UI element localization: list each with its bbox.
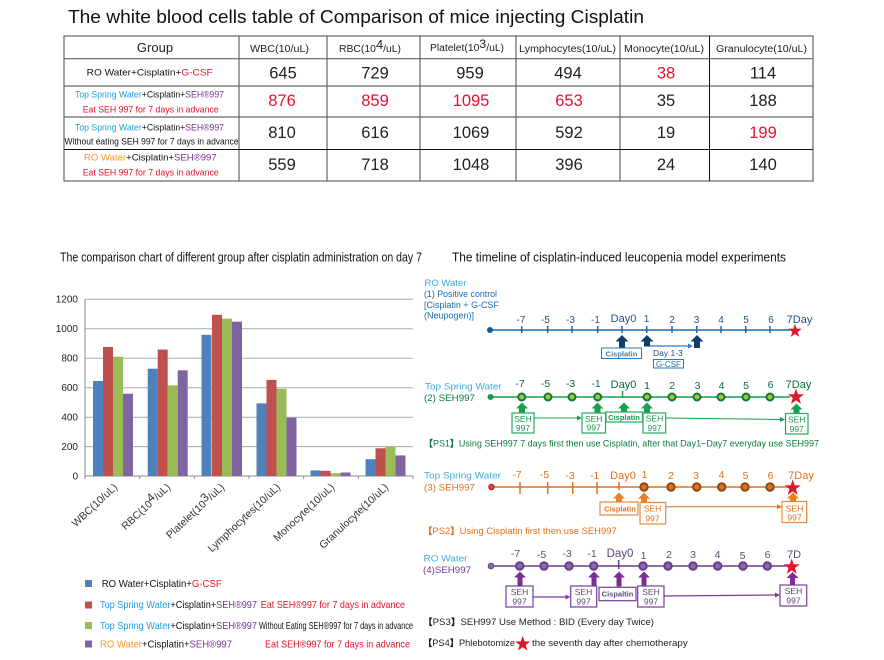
- timeline 2: Top Spring Water SEH997: 997: [516, 423, 530, 433]
- timeline 2: Top Spring Water SEH997: Cisplatin: [608, 413, 640, 422]
- y axis labels: 600: [61, 383, 78, 394]
- table values: 188: [749, 92, 777, 110]
- table group labels: RO Water+Cisplatin+ G-CSF: [87, 68, 213, 78]
- x axis category labels: 3: [197, 490, 212, 505]
- chart legend: Eat SEH®997 for 7 days in advance: [261, 599, 405, 611]
- chart legend: Top Spring Water+Cisplatin+SEH®997: [100, 599, 257, 611]
- timeline 3: Top Spring Water SEH997 after Cisplatin: (3) SEH997: [424, 483, 475, 493]
- title: The white blood cells table of Comparison of mice injecting Cisplatin: [68, 7, 644, 27]
- table values: [268, 64, 777, 174]
- table header row: WBC(10/uL): [250, 43, 309, 55]
- timeline 3: Top Spring Water SEH997 after Cisplatin: -7: [512, 469, 522, 481]
- bars: RO Water plus SEH997: [123, 322, 406, 476]
- timeline 4: RO Water SEH997: SEH: [511, 587, 528, 597]
- table values: 1048: [453, 156, 489, 174]
- chart legend: RO Water+Cisplatin+G-CSF: [102, 578, 222, 590]
- timeline 3: Top Spring Water SEH997 after Cisplatin: 6: [768, 470, 774, 482]
- timeline 4: RO Water SEH997: 6: [765, 549, 771, 561]
- timeline 4: RO Water SEH997: 2: [666, 549, 672, 561]
- table values: 199: [749, 124, 777, 142]
- timeline 3: Top Spring Water SEH997 after Cisplatin: Cisplatin: [604, 504, 636, 514]
- note PS4: the seventh day after chemotherapy: [532, 638, 688, 648]
- timeline 2: Top Spring Water SEH997: 7Day: [786, 379, 812, 391]
- x axis category labels: 4: [143, 490, 158, 505]
- bar chart: [56, 294, 413, 555]
- timeline 3: Top Spring Water SEH997 after Cisplatin: 5: [743, 470, 749, 482]
- timeline 4: RO Water SEH997: Day0: [607, 548, 633, 560]
- timeline 2: Top Spring Water SEH997: 6: [768, 379, 774, 391]
- timeline 2: Top Spring Water SEH997: -7: [515, 378, 525, 390]
- timeline 1: positive control: 5: [743, 315, 749, 326]
- timeline 4: RO Water SEH997: [423, 548, 807, 607]
- timeline 1: positive control: (1) Positive control: [424, 289, 497, 299]
- timeline 2: Top Spring Water SEH997: SEH: [646, 414, 663, 424]
- table values: 876: [268, 92, 296, 110]
- chart legend: RO Water+Cisplatin+SEH®997: [100, 639, 232, 651]
- timeline 2: Top Spring Water SEH997: 997: [587, 422, 601, 432]
- table header row: Lymphocytes(10/uL): [519, 44, 616, 55]
- timeline 3: Top Spring Water SEH997 after Cisplatin: 997: [645, 514, 660, 524]
- y axis labels: [56, 294, 78, 482]
- x axis category labels: Lymphocytes(10/uL): [206, 481, 283, 555]
- timeline 1: positive control: 3: [694, 315, 700, 326]
- table header row: 3: [479, 37, 487, 51]
- timeline 2: Top Spring Water SEH997: 【PS1】Using SEH997 7 days first then use Cisplatin, after that Day1~Day7 everyday use SEH997: [424, 439, 819, 449]
- x axis category labels: Monocyte(10/uL): [271, 481, 337, 544]
- timeline 3: Top Spring Water SEH997 after Cisplatin: 2: [668, 470, 674, 482]
- timeline 1: positive control: 4: [718, 315, 724, 326]
- table header row: /uL): [486, 43, 504, 54]
- timeline 3: Top Spring Water SEH997 after Cisplatin: 1: [642, 469, 648, 481]
- timeline 4: RO Water SEH997: SEH: [642, 587, 660, 597]
- timeline 3: Top Spring Water SEH997 after Cisplatin: 4: [719, 469, 725, 481]
- table values: 140: [749, 156, 777, 174]
- timeline 1: positive control: 7Day: [787, 314, 813, 326]
- timeline 1: positive control: (Neupogen)]: [424, 310, 474, 320]
- timeline 1: positive control: Day 1-3: [653, 348, 683, 358]
- timeline 4: RO Water SEH997: 997: [576, 596, 591, 606]
- timeline 3: Top Spring Water SEH997 after Cisplatin: Top Spring Water: [424, 471, 501, 481]
- timeline 1: positive control: 6: [768, 315, 774, 326]
- note PS4: [423, 636, 688, 650]
- y axis labels: 1000: [56, 324, 78, 335]
- timeline 3: Top Spring Water SEH997 after Cisplatin: -5: [540, 469, 549, 481]
- table values: 810: [268, 124, 296, 142]
- timeline 3: Top Spring Water SEH997 after Cisplatin: -1: [590, 470, 599, 482]
- timeline 2: Top Spring Water SEH997: Top Spring Water: [425, 381, 502, 391]
- timeline 4: RO Water SEH997: 997: [786, 596, 801, 606]
- timeline 2: Top Spring Water SEH997: -1: [591, 378, 601, 390]
- table header row: Group: [137, 40, 173, 55]
- x axis category labels: /uL): [152, 481, 173, 503]
- timeline 4: RO Water SEH997: 997: [644, 596, 658, 606]
- timeline 4: RO Water SEH997: -7: [511, 548, 520, 560]
- table group labels: Without eating SEH 997 for 7 days in advance: [64, 137, 238, 148]
- timeline 2: Top Spring Water SEH997: 5: [743, 380, 749, 392]
- table values: 592: [555, 124, 583, 142]
- timeline 3: Top Spring Water SEH997 after Cisplatin: Day0: [610, 470, 636, 482]
- timeline 1: positive control: 1: [644, 314, 650, 325]
- table group labels: Top Spring Water+Cisplatin+SEH®997: [75, 123, 224, 134]
- table values: 559: [268, 156, 296, 174]
- timeline 3: Top Spring Water SEH997 after Cisplatin: SEH: [786, 504, 803, 514]
- x axis category labels: Platelet(10: [164, 498, 209, 541]
- timeline 1: positive control: Cisplatin: [606, 350, 638, 358]
- timeline 4: RO Water SEH997: SEH: [785, 586, 802, 596]
- table values: 19: [657, 124, 675, 142]
- table values: 114: [750, 64, 776, 82]
- table group labels: [64, 68, 238, 178]
- chart legend: [85, 578, 413, 651]
- bars: Top Spring Water, eat in advance: [103, 315, 386, 476]
- table values: 959: [456, 64, 484, 82]
- timeline 3: Top Spring Water SEH997 after Cisplatin: -3: [565, 470, 575, 482]
- x axis category labels: Granulocyte(10/uL): [317, 481, 391, 551]
- timeline 4: RO Water SEH997: -3: [562, 548, 572, 560]
- timeline 4: RO Water SEH997: 1: [641, 550, 647, 562]
- timeline 2: Top Spring Water SEH997: 997: [647, 423, 662, 433]
- table values: 38: [657, 64, 675, 82]
- timeline 4: RO Water SEH997: 3: [690, 549, 696, 561]
- timeline 1: positive control: Day0: [611, 313, 636, 325]
- timeline 4: RO Water SEH997: 7D: [787, 549, 801, 561]
- chart legend: Without Eating SEH®997 for 7 days in advance: [259, 620, 413, 632]
- timeline 3: Top Spring Water SEH997 after Cisplatin: SEH: [644, 504, 661, 514]
- y axis labels: 0: [72, 472, 78, 482]
- bars: RO Water group: [93, 335, 376, 476]
- timeline 1: positive control: -3: [566, 315, 575, 326]
- x axis category labels: [70, 478, 391, 555]
- timeline 3: Top Spring Water SEH997 after Cisplatin: 997: [787, 512, 802, 522]
- timeline 2: Top Spring Water SEH997: SEH: [514, 414, 532, 424]
- timeline 2: Top Spring Water SEH997: 1: [644, 380, 650, 392]
- timeline 2: Top Spring Water SEH997: 3: [695, 380, 701, 392]
- timeline heading: The timeline of cisplatin-induced leucopenia model experiments: [452, 251, 786, 265]
- timeline 4: RO Water SEH997: 5: [740, 550, 746, 562]
- timeline 3: Top Spring Water SEH997 after Cisplatin: 3: [693, 470, 699, 482]
- timeline 4: RO Water SEH997: RO Water: [424, 554, 468, 564]
- timeline 1: positive control: RO Water: [424, 278, 466, 289]
- timeline 1: positive control: -1: [591, 315, 600, 326]
- chart legend: Eat SEH®997 for 7 days in advance: [265, 639, 410, 651]
- table values: 35: [657, 92, 675, 110]
- table header row: Monocyte(10/uL): [624, 44, 704, 55]
- table values: 616: [361, 124, 389, 142]
- note PS3: 【PS3】SEH997 Use Method : BID (Every day Twice): [423, 617, 654, 627]
- timeline 1: positive control: 2: [669, 315, 675, 326]
- timeline 2: Top Spring Water SEH997: SEH: [788, 414, 805, 424]
- table header row: Platelet(10: [430, 43, 478, 54]
- x axis category labels: WBC(10/uL): [70, 481, 120, 530]
- table group labels: Eat SEH 997 for 7 days in advance: [83, 105, 219, 116]
- timeline 2: Top Spring Water SEH997: [424, 378, 819, 449]
- timeline 3: Top Spring Water SEH997 after Cisplatin: 7Day: [788, 470, 814, 482]
- table header row: Granulocyte(10/uL): [716, 44, 807, 55]
- timeline 2: Top Spring Water SEH997: 2: [669, 380, 675, 392]
- timeline 2: Top Spring Water SEH997: 4: [719, 380, 725, 392]
- timeline 4: RO Water SEH997: -5: [537, 549, 546, 561]
- timeline 2: Top Spring Water SEH997: SEH: [585, 414, 602, 424]
- timeline 1: positive control: [424, 278, 813, 369]
- table values: 396: [555, 156, 583, 174]
- timeline 2: Top Spring Water SEH997: -5: [541, 378, 550, 390]
- y axis labels: 800: [61, 354, 78, 364]
- bars: Top Spring Water, without eating: [113, 319, 396, 476]
- table header row: [137, 37, 807, 55]
- table header row: RBC(10: [339, 43, 376, 55]
- table values: 718: [361, 156, 389, 174]
- x axis category labels: /uL): [206, 481, 227, 503]
- table values: 729: [361, 64, 389, 82]
- timeline 4: RO Water SEH997: 4: [715, 549, 721, 561]
- table values: 1095: [453, 92, 489, 110]
- timeline 4: RO Water SEH997: -1: [587, 548, 597, 560]
- table header row: 4: [376, 37, 383, 52]
- y axis labels: 200: [61, 442, 78, 453]
- table values: 653: [555, 92, 583, 110]
- table group labels: Eat SEH 997 for 7 days in advance: [83, 167, 219, 178]
- timeline 3: Top Spring Water SEH997 after Cisplatin: [423, 469, 814, 536]
- timeline 2: Top Spring Water SEH997: -3: [566, 378, 575, 390]
- note PS4: 【PS4】Phlebotomize: [423, 638, 515, 648]
- timeline 2: Top Spring Water SEH997: 997: [790, 424, 804, 434]
- timeline 3: Top Spring Water SEH997 after Cisplatin: 【PS2】Using Cisplatin first then use SEH997: [423, 526, 617, 536]
- timeline 2: Top Spring Water SEH997: (2) SEH997: [424, 393, 475, 403]
- timeline 4: RO Water SEH997: 997: [512, 596, 527, 606]
- timeline 4: RO Water SEH997: (4)SEH997: [423, 565, 471, 575]
- comparison table: [64, 36, 813, 181]
- timeline 1: positive control: G-CSF: [656, 360, 681, 369]
- timeline 1: positive control: -7: [517, 315, 526, 326]
- timeline 2: Top Spring Water SEH997: Day0: [611, 379, 636, 391]
- y axis labels: 1200: [56, 294, 78, 306]
- table values: 24: [657, 156, 675, 174]
- timeline 4: RO Water SEH997: SEH: [575, 587, 592, 597]
- table group labels: Top Spring Water+Cisplatin+SEH®997: [75, 90, 224, 101]
- y axis labels: 400: [61, 412, 78, 424]
- timeline 4: RO Water SEH997: Cispaltin: [602, 590, 634, 598]
- table header row: /uL): [383, 43, 401, 55]
- chart legend: Top Spring Water+Cisplatin+SEH®997: [100, 620, 257, 632]
- chart heading: The comparison chart of different group after cisplatin administration on day 7: [60, 251, 422, 265]
- table values: 494: [554, 64, 582, 82]
- table group labels: RO Water+Cisplatin+SEH®997: [84, 152, 217, 163]
- table values: 1069: [453, 124, 489, 142]
- table values: 859: [361, 92, 389, 110]
- timeline 1: positive control: -5: [541, 315, 550, 326]
- timeline 1: positive control: [Cisplatin + G-CSF: [424, 300, 499, 310]
- table values: 645: [269, 64, 297, 82]
- x axis category labels: RBC(10: [119, 498, 155, 533]
